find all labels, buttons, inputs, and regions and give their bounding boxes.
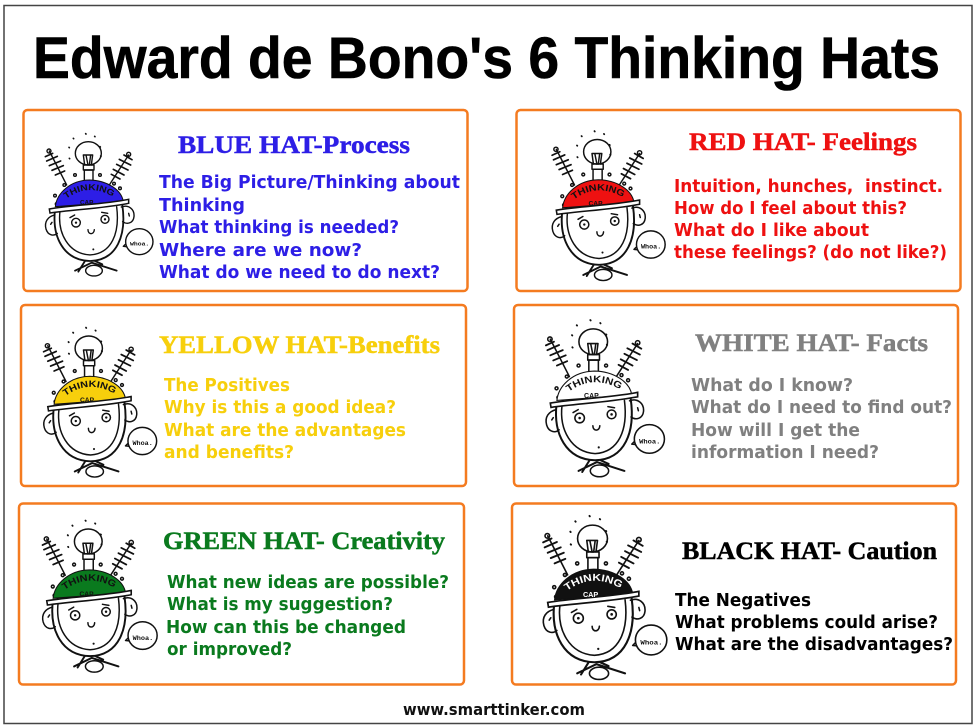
text: white hat questions: [691, 376, 952, 463]
icon: character with green thinking cap: [42, 520, 158, 673]
text: black hat questions: The Negatives: [675, 591, 811, 611]
text: white hat questions: What do I need to find out?: [691, 398, 952, 418]
text: black hat questions: [675, 591, 953, 655]
text: yellow hat questions: What are the advantages: [164, 421, 406, 441]
icon: character with blue thinking cap: [44, 132, 154, 277]
footer website: www.smarttinker.com: [403, 700, 585, 719]
text: blue hat questions: What do we need to do next?: [159, 263, 440, 283]
text: white hat questions: How will I get the: [691, 421, 860, 441]
icon: character with yellow thinking cap: THINKING: [62, 380, 116, 395]
panel: red hat: [515, 108, 962, 292]
panel: green hat: [18, 502, 466, 686]
panel: blue hat: [22, 108, 469, 292]
text: black hat questions: What problems could arise?: [675, 613, 938, 633]
icon: character with white thinking cap: CAP: [584, 393, 599, 400]
text: green hat questions: What new ideas are possible?: [167, 573, 449, 593]
heading: green hat: GREEN HAT- Creativity: [163, 528, 446, 555]
text: blue hat questions: [159, 173, 460, 283]
text: green hat questions: What is my suggestion?: [167, 595, 393, 615]
icon: character with white thinking cap: [545, 319, 666, 478]
text: red hat questions: What do I like about: [674, 221, 869, 241]
panel: black hat: [510, 502, 958, 686]
icon: character with red thinking cap: [551, 130, 666, 282]
text: white hat questions: What do I know?: [691, 376, 853, 396]
text: yellow hat questions: Why is this a good idea?: [164, 398, 396, 418]
text: yellow hat questions: and benefits?: [164, 443, 294, 463]
text: green hat questions: or improved?: [167, 640, 292, 660]
text: red hat questions: [674, 177, 947, 263]
text: blue hat questions: What thinking is needed?: [159, 218, 399, 238]
text: red hat questions: How do I feel about this?: [674, 199, 907, 219]
icon: character with green thinking cap: CAP: [79, 591, 94, 598]
icon: character with yellow thinking cap: CAP: [80, 397, 95, 404]
heading: red hat: RED HAT- Feelings: [689, 129, 917, 156]
text: red hat questions: Intuition, hunches, instinct.: [674, 177, 943, 197]
heading: yellow hat: YELLOW HAT-Benefits: [159, 332, 440, 359]
text: yellow hat questions: [164, 376, 406, 463]
icon: character with black thinking cap: [542, 514, 668, 680]
text: yellow hat questions: The Positives: [164, 376, 290, 396]
icon: character with red thinking cap: CAP: [589, 200, 603, 207]
heading: white hat: WHITE HAT- Facts: [695, 330, 928, 357]
text: blue hat questions: The Big Picture/Thinking about: [159, 173, 460, 193]
text: black hat questions: What are the disadvantages?: [675, 635, 953, 655]
text: blue hat questions: Where are we now?: [159, 241, 362, 261]
heading: black hat: BLACK HAT- Caution: [682, 538, 937, 565]
panel: white hat: [512, 304, 960, 488]
text: red hat questions: these feelings? (do not like?): [674, 243, 947, 263]
text: white hat questions: information I need?: [691, 443, 879, 463]
panel: yellow hat: [20, 304, 468, 488]
text: green hat questions: How can this be changed: [166, 618, 406, 638]
heading: blue hat: BLUE HAT-Process: [178, 132, 410, 159]
icon: character with green thinking cap: THINKING: [61, 574, 116, 588]
icon: character with black thinking cap: CAP: [583, 590, 598, 599]
icon: character with blue thinking cap: THINKING: [62, 184, 114, 198]
icon: character with blue thinking cap: CAP: [80, 199, 93, 206]
title: Edward de Bono's 6 Thinking Hats: [33, 26, 940, 91]
icon: character with black thinking cap: THINKING: [563, 574, 622, 590]
icon: character with white thinking cap: THINKING: [565, 376, 622, 390]
text: blue hat questions: Thinking: [159, 196, 245, 216]
text: green hat questions: [166, 573, 449, 660]
icon: character with yellow thinking cap: [42, 326, 158, 478]
icon: character with red thinking cap: THINKING: [570, 184, 624, 198]
